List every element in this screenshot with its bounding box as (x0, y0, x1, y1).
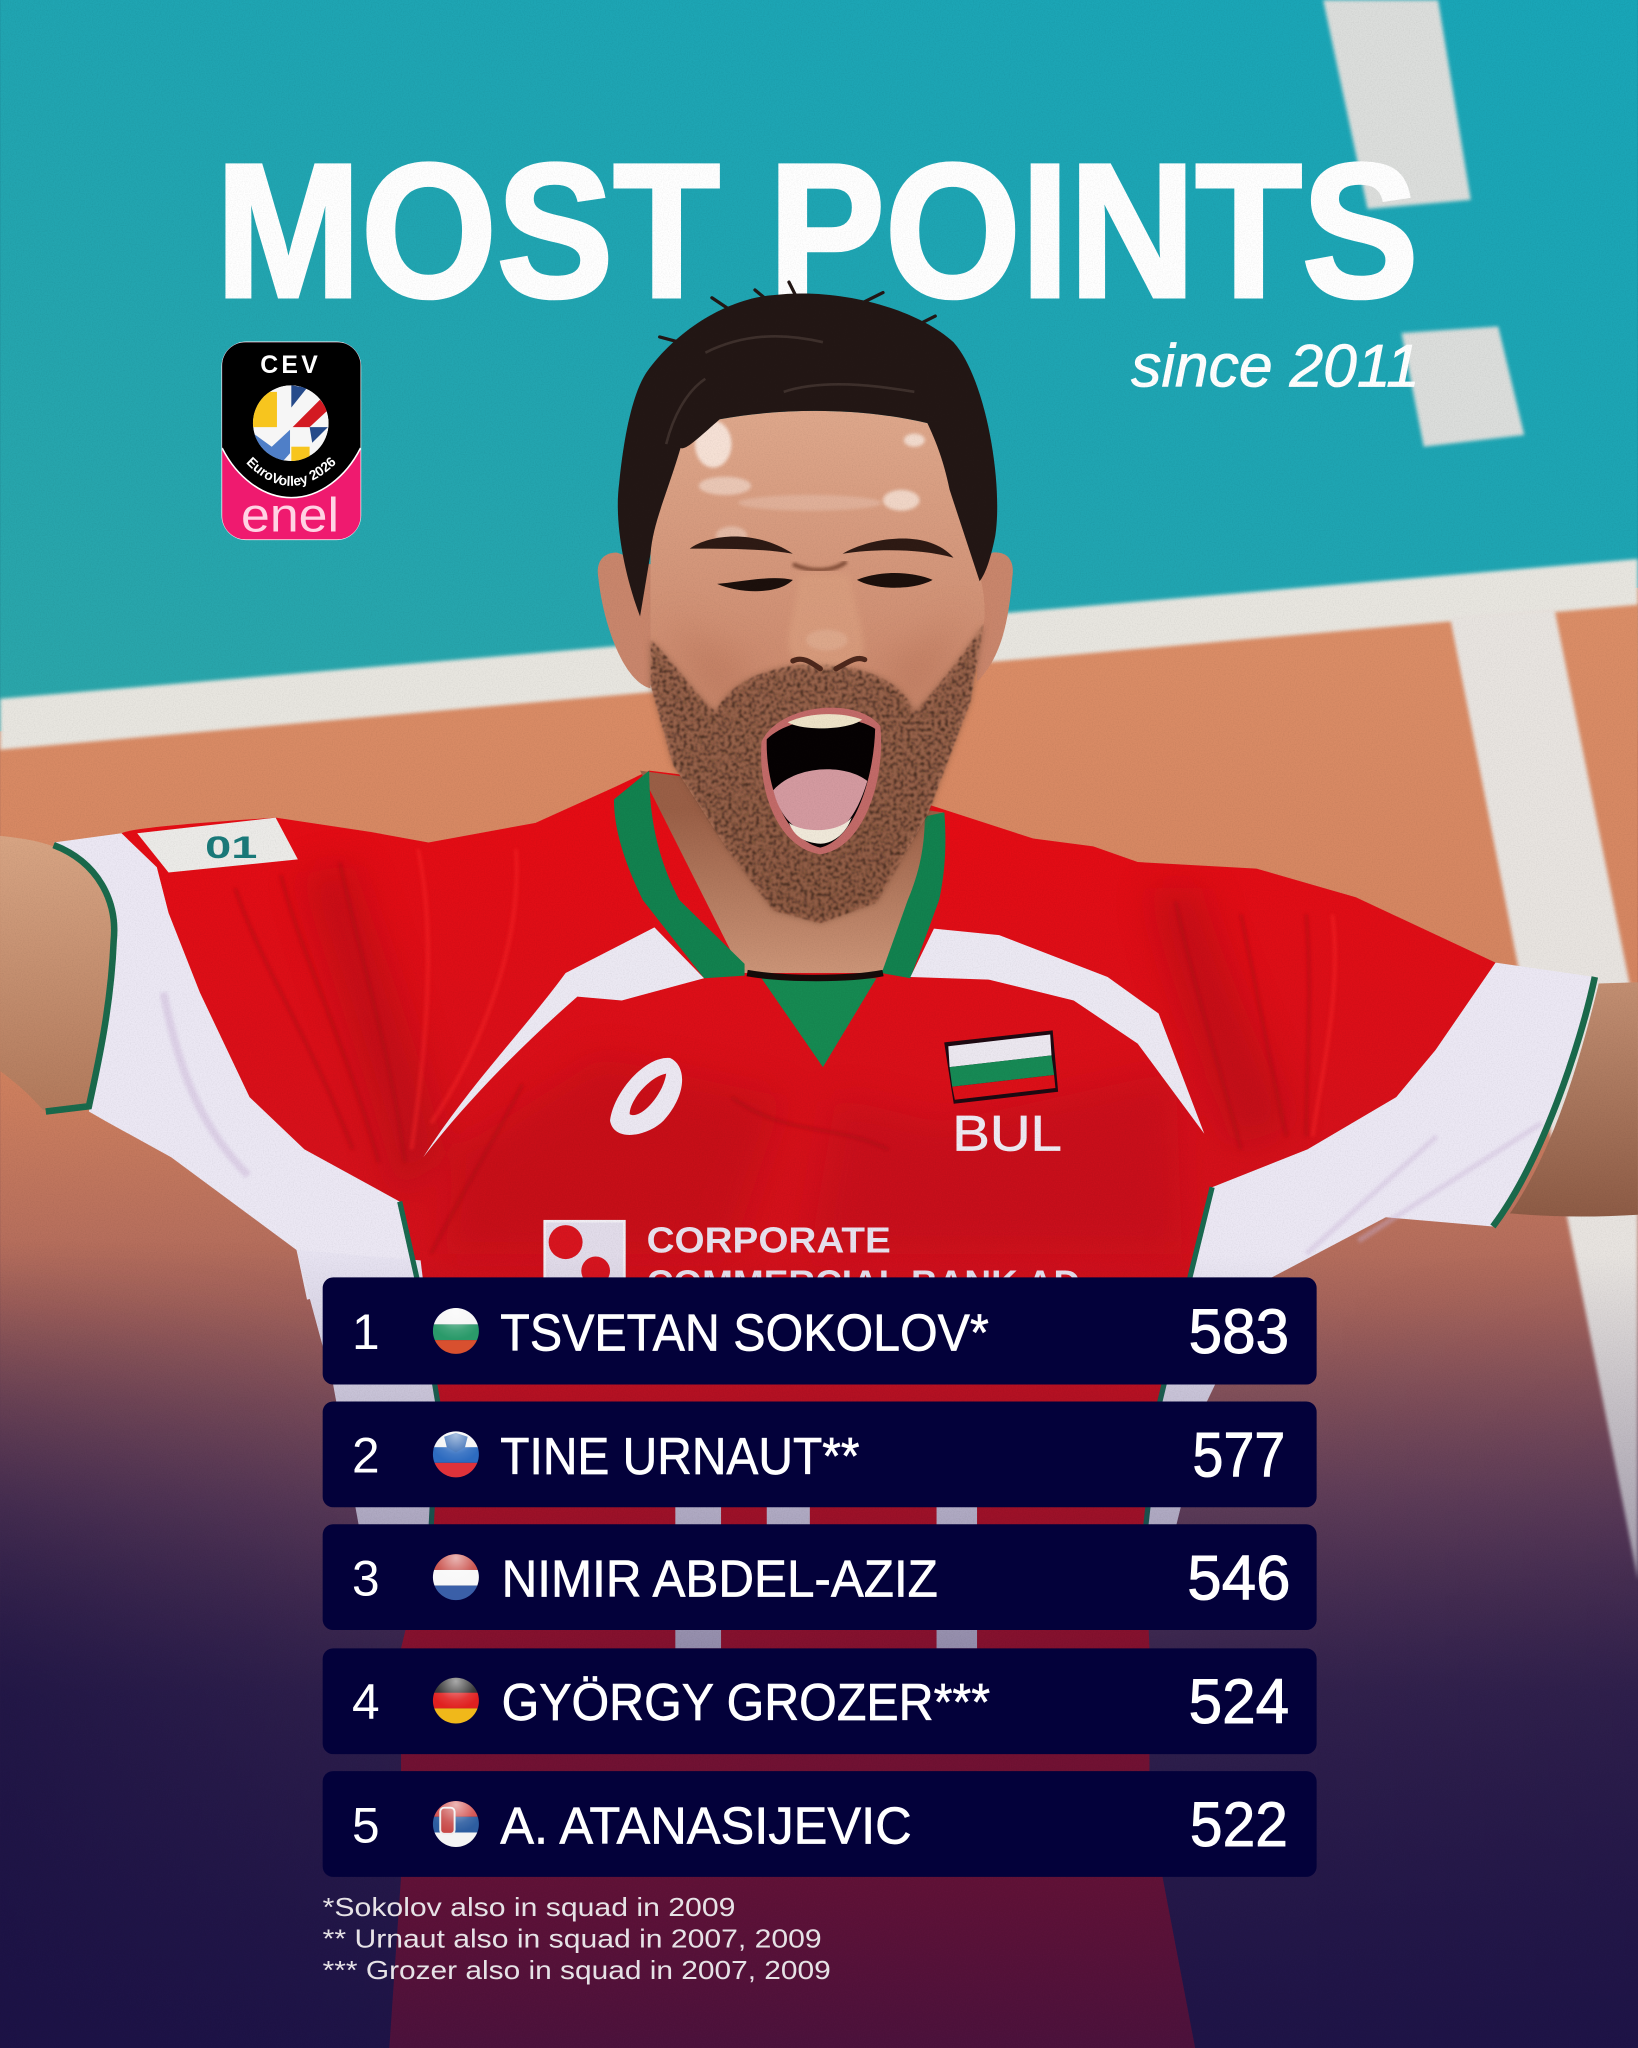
forehead highlights (695, 421, 925, 650)
flag: Netherlands (431, 1553, 481, 1601)
row 4: Grozer: GYÖRGY GROZER*** (502, 1674, 990, 1732)
row 5: Atanasijevic: 5 (352, 1797, 380, 1853)
face skin (651, 411, 985, 923)
left arm (0, 836, 114, 1110)
background: orange court floor fading to navy (0, 588, 1638, 2048)
sponsor text: CORPORATE (647, 1220, 891, 1261)
row 4: Grozer: 524 (1189, 1667, 1289, 1737)
row 2: Urnaut: 577 (1193, 1421, 1285, 1491)
footnotes (323, 1892, 831, 1985)
row 2: Urnaut (323, 1401, 1317, 1507)
sponsor logo box (545, 1221, 624, 1285)
sleeve cuff trims (46, 845, 1595, 1226)
jersey white stripe stubs (675, 1502, 977, 1648)
row 1: Sokolov: TSVETAN SOKOLOV* (500, 1305, 989, 1363)
beard stubble (651, 624, 984, 923)
row 2: Urnaut: TINE URNAUT** (500, 1428, 859, 1486)
left white sleeve panel (54, 833, 417, 1300)
right sleeve creases (1306, 1123, 1541, 1254)
row 4: Grozer (323, 1648, 1317, 1754)
mouth cavity (767, 718, 875, 848)
background: teal court surround (0, 0, 1638, 731)
head (598, 282, 1013, 923)
collar: right green band (882, 812, 945, 978)
left ear (598, 552, 651, 688)
row 4: Grozer: 4 (352, 1674, 380, 1730)
eyes (717, 573, 933, 591)
row 3: Abdel-Aziz: NIMIR ABDEL-AZIZ (502, 1551, 938, 1609)
logo text enel: enel (241, 489, 339, 543)
chest white curved stripes (423, 927, 1204, 1157)
row 2: Urnaut: 2 (352, 1428, 380, 1484)
Bulgarian flag patch (946, 1032, 1057, 1102)
logo text CEV: CEV (260, 352, 321, 379)
side seams (400, 1187, 1212, 1528)
nostrils (793, 659, 865, 669)
row 1: Sokolov (323, 1277, 1317, 1384)
hair highlights (666, 336, 914, 444)
cheek shading (673, 607, 960, 712)
flag: Slovenia (431, 1430, 481, 1479)
row 1: Sokolov: 583 (1189, 1297, 1289, 1367)
floor left vignette (0, 1277, 322, 1854)
neck (640, 771, 943, 973)
ranking table (323, 1277, 1317, 1877)
upper teeth (788, 714, 862, 728)
row 3: Abdel-Aziz: 546 (1187, 1543, 1291, 1613)
row 5: Atanasijevic (323, 1771, 1317, 1877)
right side panel (1146, 1277, 1267, 1528)
jersey torso and sleeves (122, 771, 1496, 2048)
row 3: Abdel-Aziz (323, 1524, 1317, 1630)
row 1: Sokolov: 1 (352, 1304, 380, 1360)
left side panel (297, 1250, 438, 1528)
background: top right white line marks (1323, 0, 1524, 447)
nose (788, 575, 864, 668)
logo emblem (248, 385, 329, 465)
right ear (977, 552, 1013, 682)
right arm (1510, 982, 1638, 1217)
logo text EuroVolley 2026: EuroVolley 2026 (246, 456, 336, 488)
flag: Bulgaria (432, 1308, 479, 1354)
title: MOST POINTS (216, 124, 1419, 337)
brow furrow (793, 562, 846, 570)
row 5: Atanasijevic: 522 (1190, 1790, 1288, 1860)
subtitle: since 2011 (1131, 333, 1420, 400)
footnotes: *Sokolov also in squad in 2009 (323, 1892, 735, 1922)
hair (618, 293, 997, 616)
flag: Serbia (431, 1800, 481, 1848)
row 3: Abdel-Aziz: 3 (352, 1550, 380, 1606)
row 5: Atanasijevic: A. ATANASIJEVIC (500, 1798, 912, 1856)
shoulder sponsor badge: 01 (205, 830, 257, 865)
left sleeve crease (163, 993, 248, 1176)
beard base (651, 624, 984, 923)
collar: left green band (614, 771, 745, 978)
hair strands (660, 282, 935, 342)
flag: Germany (432, 1678, 479, 1724)
bottom fade overlay (0, 1254, 1638, 2048)
background: white court boundary line (0, 559, 1638, 750)
right white sleeve panel (1190, 963, 1595, 1280)
tongue (773, 769, 867, 836)
open mouth (761, 708, 881, 854)
jersey shading and folds (235, 849, 1335, 1254)
sponsor text second line: COMMERCIAL BANK AD (647, 1263, 1080, 1304)
lips (761, 708, 881, 854)
green inner v-neck (762, 978, 876, 1067)
asics logo (610, 1058, 682, 1135)
jersey text BUL: BUL (952, 1106, 1062, 1162)
footnotes: ** Urnaut also in squad in 2007, 2009 (323, 1923, 822, 1953)
neck shadow line (747, 973, 883, 978)
lower teeth (789, 818, 852, 844)
logo: CEV EuroVolley 2026 enel (221, 342, 362, 543)
eyebrows (690, 536, 954, 558)
shoulder sponsor badge (137, 818, 298, 872)
footnotes: *** Grozer also in squad in 2007, 2009 (323, 1955, 831, 1985)
background: right court line (1450, 609, 1638, 1580)
